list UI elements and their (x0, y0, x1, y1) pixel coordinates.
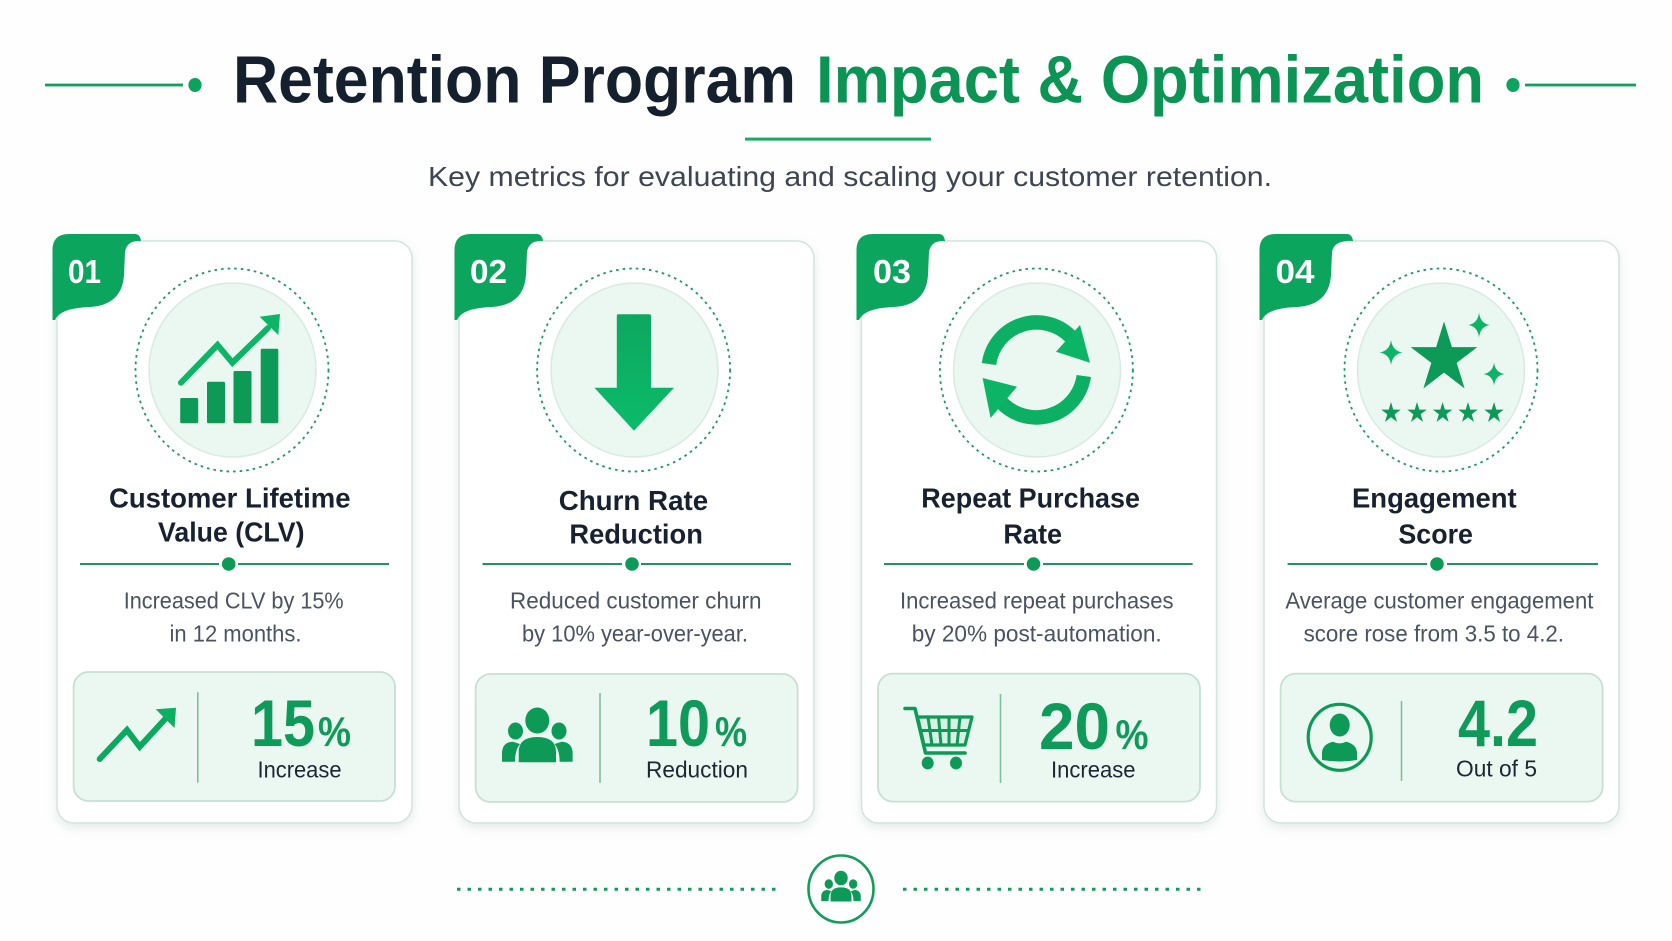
card 2: churn rate reduction (454, 234, 814, 823)
stat box (476, 674, 798, 802)
subtitle: Key metrics for evaluating and scaling your customer retention. (428, 161, 1272, 192)
stat value: 10 (646, 686, 710, 760)
icon: shopping cart (905, 708, 972, 769)
number tab (52, 234, 141, 320)
heading: Customer Lifetime (109, 482, 350, 513)
stat value: 20 (1039, 689, 1110, 763)
description: Reduced customer churn (510, 588, 762, 614)
heading: Churn Rate (559, 485, 708, 516)
stat box (1281, 674, 1603, 802)
description: Increased repeat purchases (900, 588, 1174, 614)
number tab: 01 (68, 253, 101, 290)
icon: user circle (1308, 704, 1371, 770)
stat label: Reduction (646, 756, 748, 782)
heading: Value (CLV) (158, 517, 304, 548)
stat value: % (1116, 711, 1148, 758)
heading: Rate (1003, 518, 1062, 549)
heading: Engagement (1352, 483, 1517, 514)
divider (1288, 557, 1598, 571)
title underline (745, 138, 931, 141)
description (510, 588, 762, 646)
number tab (1260, 234, 1353, 320)
card panel (1264, 241, 1619, 823)
stat box (878, 674, 1200, 802)
icon: growth chart (136, 268, 328, 472)
stat label: Increase (1051, 756, 1136, 782)
description (1285, 588, 1594, 646)
icon: trend arrow (100, 708, 176, 759)
heading (559, 485, 708, 550)
stat value: 4.2 (1458, 686, 1538, 760)
number tab (454, 234, 543, 320)
divider (482, 557, 791, 571)
description: Increased CLV by 15% (124, 588, 344, 614)
stat label: Out of 5 (1456, 756, 1537, 782)
heading: Score (1398, 518, 1473, 549)
divider (884, 557, 1193, 571)
card 3: repeat purchase rate (856, 234, 1216, 823)
footer ornament (457, 856, 1205, 922)
description (124, 588, 344, 646)
description: by 20% post-automation. (912, 620, 1162, 646)
icon: refresh arrows (940, 268, 1133, 472)
stat value (1039, 689, 1148, 763)
number tab: 03 (873, 253, 911, 290)
icon: down arrow (537, 268, 730, 472)
stat value: % (715, 708, 747, 755)
stat value: % (318, 708, 351, 755)
heading: Reduction (569, 518, 703, 550)
footer icon: people badge (808, 856, 874, 922)
heading (109, 482, 350, 548)
stat label: Increase (258, 756, 342, 782)
description: by 10% year-over-year. (522, 620, 748, 646)
number tab: 04 (1276, 253, 1315, 290)
icon: stars (1344, 268, 1538, 472)
stat box (74, 672, 395, 801)
divider (80, 557, 389, 571)
description: Average customer engagement (1285, 588, 1594, 614)
card panel (459, 241, 814, 823)
description (900, 588, 1174, 646)
number tab: 02 (470, 253, 507, 290)
title decoration right (1506, 78, 1636, 92)
heading (921, 483, 1140, 549)
stat value: 15 (251, 686, 315, 760)
number tab (856, 234, 945, 320)
description: score rose from 3.5 to 4.2. (1304, 620, 1564, 646)
title: Impact & Optimization (816, 44, 1484, 118)
card panel (57, 241, 412, 823)
card 4: engagement score (1260, 234, 1619, 823)
title decoration left (45, 78, 202, 92)
heading: Repeat Purchase (921, 483, 1140, 514)
title: Retention Program (233, 44, 796, 118)
icon: people (502, 708, 573, 762)
heading (1352, 483, 1517, 549)
card 1: customer lifetime value (52, 234, 412, 823)
header (45, 44, 1636, 192)
card panel (862, 241, 1216, 823)
description: in 12 months. (170, 620, 302, 646)
